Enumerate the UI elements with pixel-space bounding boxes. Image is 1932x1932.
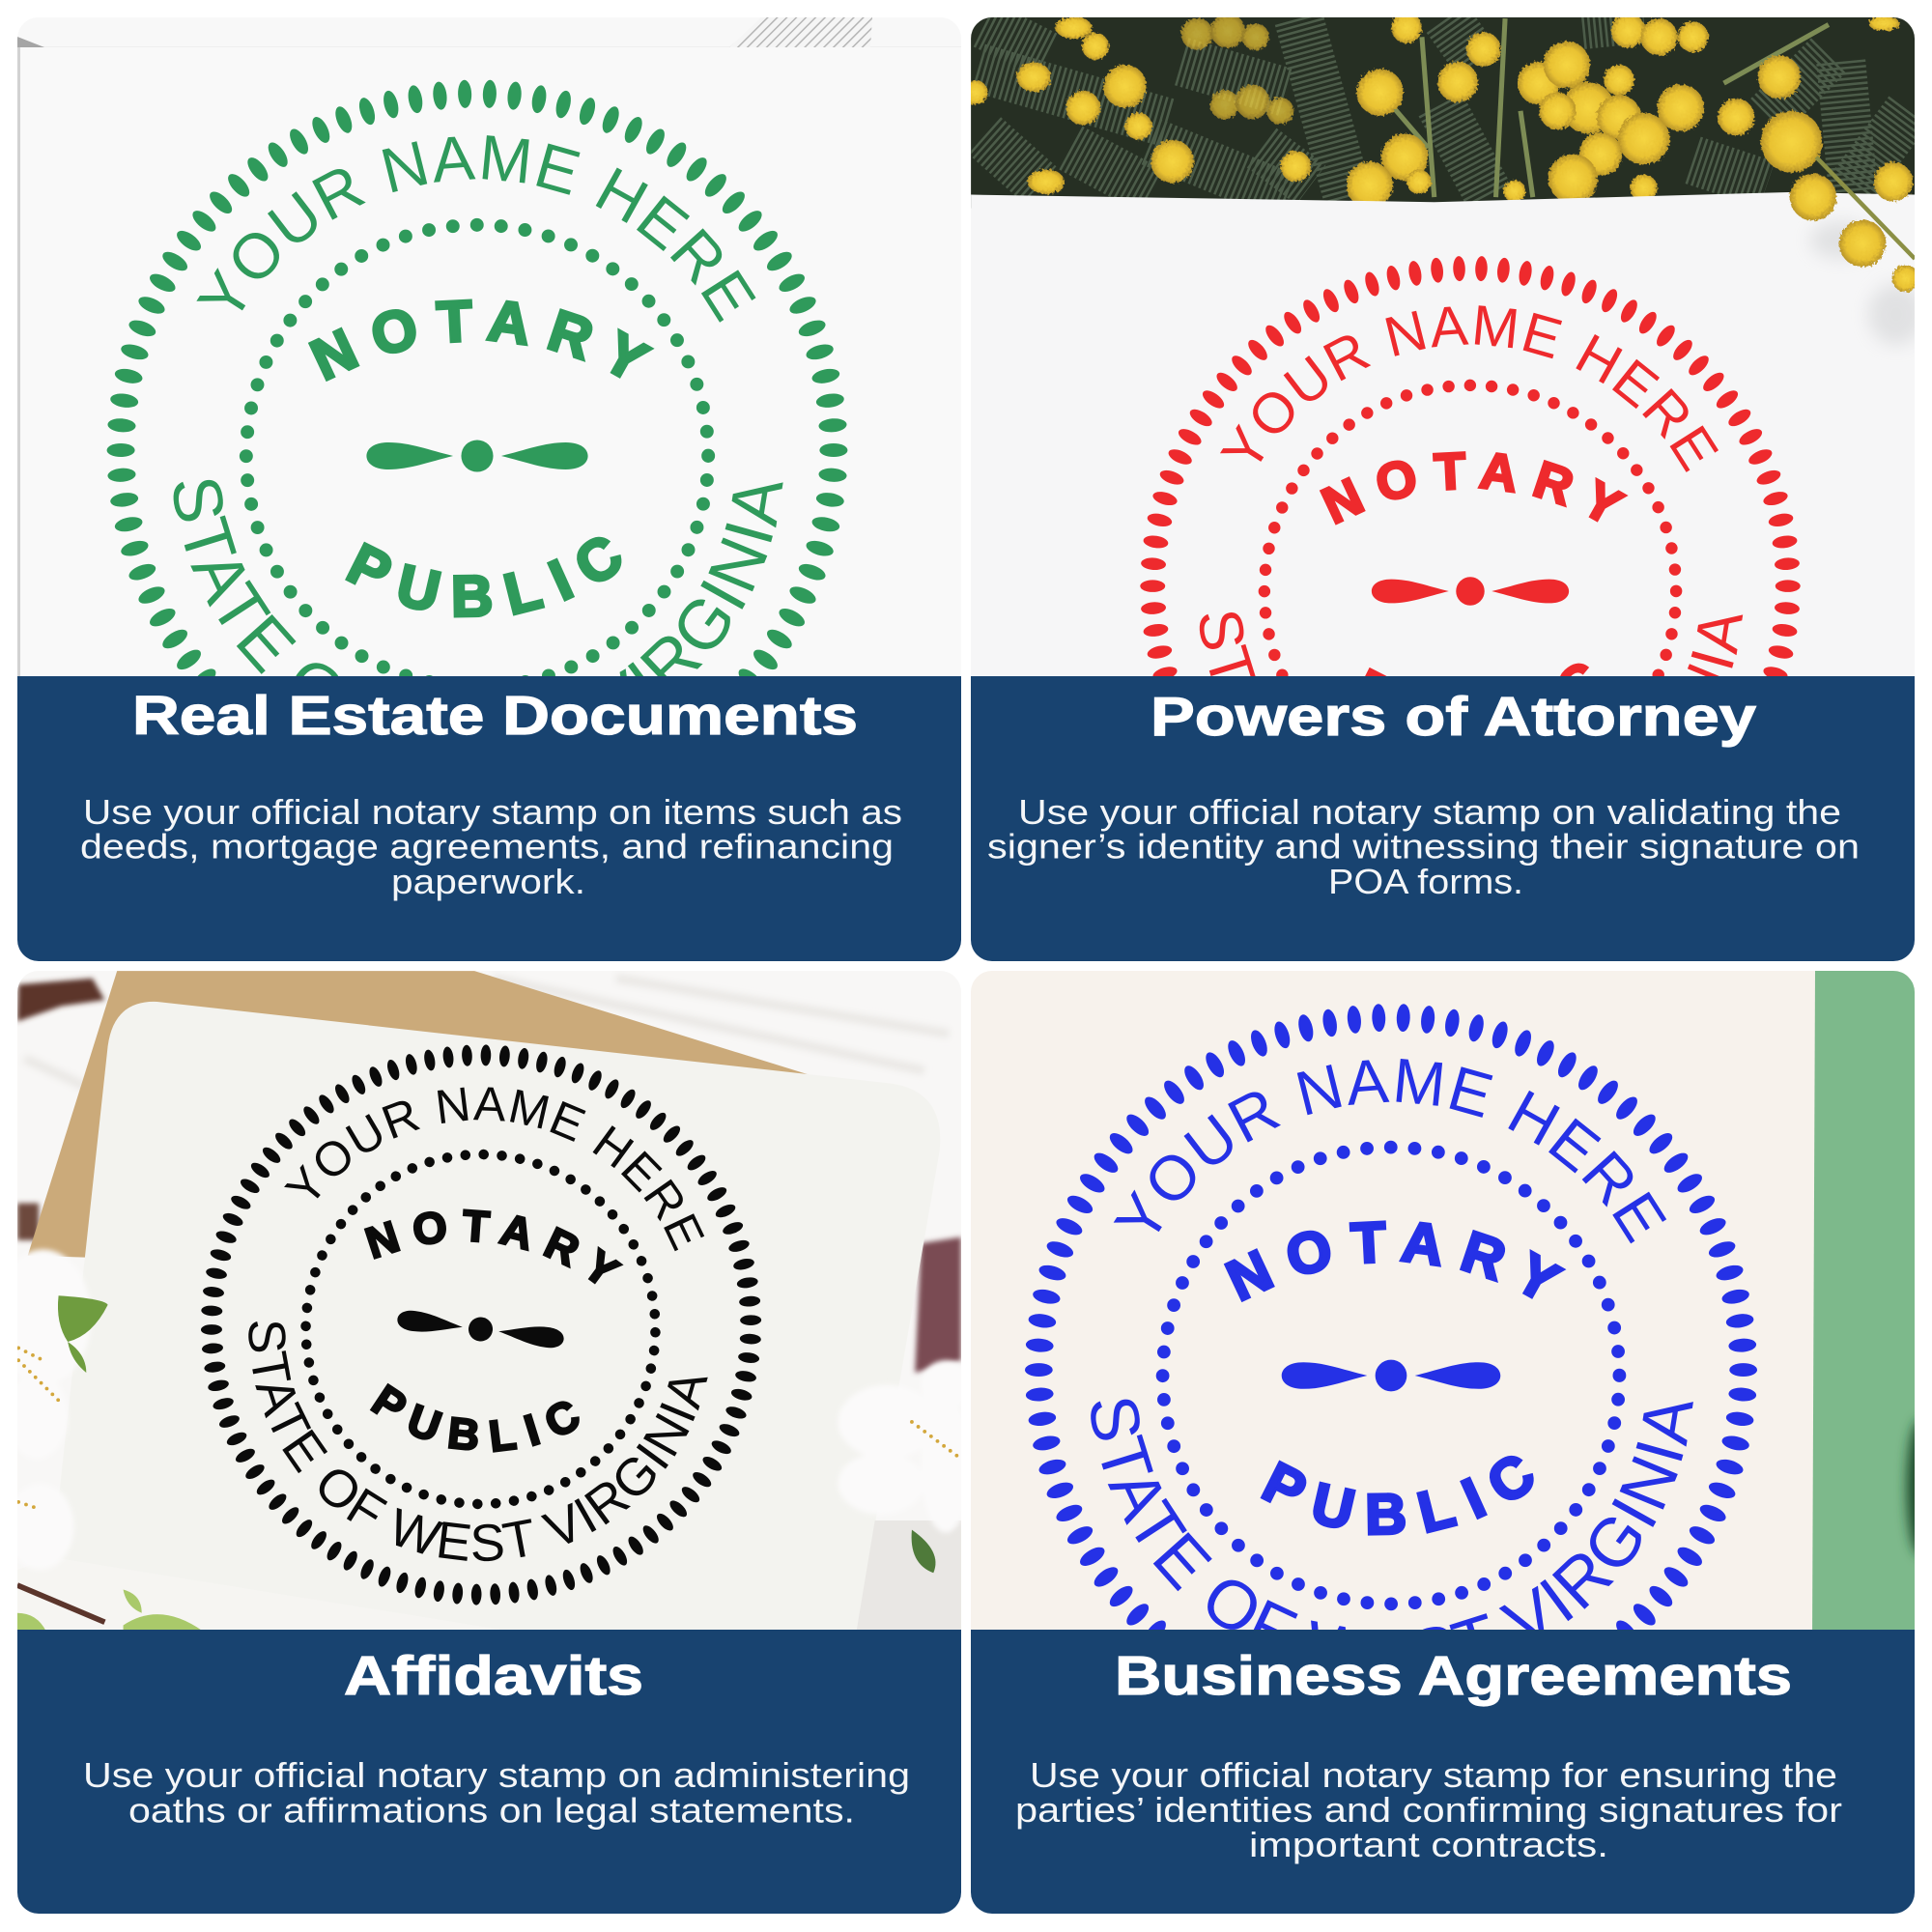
dark background branches <box>17 979 961 1373</box>
stamp: red notary seal: NOTARY <box>1320 451 1629 526</box>
photo: cream paper on green with stamp <box>971 971 1915 1914</box>
text block: real estate description: paperwork. <box>391 862 585 901</box>
stamp: black notary seal: YOUR NAME HERE <box>284 1088 705 1252</box>
paper sheet <box>971 192 1915 678</box>
text block: powers of attorney description: POA forms. <box>1328 862 1523 901</box>
stamp: green notary seal <box>106 79 848 676</box>
kraft envelope <box>28 971 832 1274</box>
text block: business agreements description <box>1015 1755 1842 1864</box>
text block: business agreements description: parties’ identities and confirming signatures for <box>1015 1790 1842 1830</box>
panel: business agreements <box>971 971 1915 1914</box>
text block: powers of attorney description <box>987 792 1860 901</box>
caption background <box>971 676 1915 961</box>
sprig <box>1790 157 1919 292</box>
text block: real estate description: Use your official notary stamp on items such as <box>83 792 902 832</box>
stamp: green notary seal: PUBLIC <box>345 537 622 618</box>
caption background <box>17 1630 961 1914</box>
text block: affidavits description: Use your official notary stamp on administering <box>83 1755 910 1795</box>
stamp: green notary seal: NOTARY <box>307 299 655 383</box>
stamp: blue notary seal: PUBLIC <box>1260 1455 1534 1536</box>
text block: business agreements description: Use your official notary stamp for ensuring the <box>1030 1755 1837 1795</box>
stamp: black notary seal: NOTARY <box>363 1208 624 1285</box>
stamp: red notary seal <box>1140 256 1801 676</box>
cloth shading <box>25 979 949 1095</box>
caption background <box>17 676 961 961</box>
panel: powers of attorney <box>971 17 1915 961</box>
text block: affidavits description <box>83 1755 910 1830</box>
stamp: blue notary seal <box>1024 1004 1758 1630</box>
stamens <box>18 1348 961 1508</box>
stamp: black notary seal <box>201 1044 761 1605</box>
panel: real estate documents <box>17 17 961 961</box>
foliage <box>963 13 1915 209</box>
text block: powers of attorney description: Use your official notary stamp on validating the <box>1018 792 1841 832</box>
photo: yellow mimosa with paper and stamp <box>971 17 1915 961</box>
heading: business agreements: Business Agreements <box>1115 1645 1792 1707</box>
stamp: black notary seal: STATE OF WEST VIRGINIA <box>248 1321 708 1561</box>
text block: affidavits description: oaths or affirmations on legal statements. <box>128 1791 855 1830</box>
text block: powers of attorney description: signer’s identity and witnessing their signature on <box>987 827 1860 866</box>
stamp: green notary seal: YOUR NAME HERE <box>197 135 755 323</box>
leaves and branch <box>17 1295 935 1632</box>
blossoms <box>0 1249 971 1570</box>
photo: white paper with stamp <box>17 17 961 961</box>
caption background <box>971 1630 1915 1914</box>
stamp: red notary seal: YOUR NAME HERE <box>1220 305 1719 472</box>
heading: affidavits: Affidavits <box>344 1645 643 1707</box>
panel: affidavits <box>17 971 961 1914</box>
stamp: red notary seal: STATE OF WEST VIRGINIA <box>1200 612 1743 676</box>
text block: business agreements description: important contracts. <box>1249 1825 1608 1864</box>
sprig shadow <box>1810 222 1924 345</box>
heading: powers of attorney: Powers of Attorney <box>1151 686 1756 748</box>
stamp: red notary seal: PUBLIC <box>1365 663 1590 676</box>
text block: real estate description: deeds, mortgage agreements, and refinancing <box>80 827 894 866</box>
stamp: blue notary seal: YOUR NAME HERE <box>1113 1059 1667 1244</box>
stamp: green notary seal: STATE OF WEST VIRGINIA <box>174 479 783 676</box>
photo: card on kraft envelope with blossoms <box>17 971 961 1914</box>
heading: real estate documents: Real Estate Documents <box>132 685 858 747</box>
stamp: blue notary seal: NOTARY <box>1223 1220 1567 1302</box>
white card <box>85 1001 923 1289</box>
table <box>17 1557 511 1632</box>
stamp: blue notary seal: STATE OF WEST VIRGINIA <box>1091 1399 1693 1630</box>
stamp: black notary seal: PUBLIC <box>369 1383 580 1453</box>
text block: real estate description <box>80 792 902 901</box>
